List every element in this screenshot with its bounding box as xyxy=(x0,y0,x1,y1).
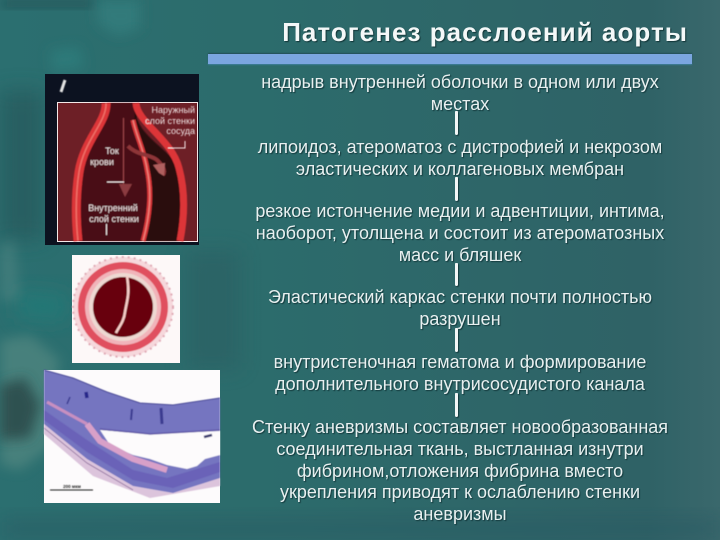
text block: intramural hematoma: внутристеночная гематома и формирование xyxy=(274,352,646,372)
arrow 2 xyxy=(455,177,458,201)
text block: aneurysm wall xyxy=(252,417,668,526)
arrow 5 xyxy=(455,393,458,417)
image: aortic dissection diagram: слой стенки xyxy=(89,214,139,224)
text block: aneurysm wall: фибрином,отложения фибрина вместо xyxy=(297,461,623,481)
image: aortic dissection diagram xyxy=(45,74,199,245)
image: aortic dissection diagram: Наружный xyxy=(152,105,195,115)
image: aortic dissection diagram: Внутренний xyxy=(88,203,138,213)
text block: elastic framework destroyed: разрушен xyxy=(419,309,501,329)
image: aortic dissection diagram: слой стенки xyxy=(145,116,195,126)
text block: aneurysm wall: Стенку аневризмы составляет новообразованная xyxy=(252,417,668,437)
text block: lipoidosis and atheromatosis: эластических и коллагеновых мембран xyxy=(296,159,624,179)
text block: aneurysm wall: аневризмы xyxy=(413,504,507,524)
text block: media thinning xyxy=(255,201,665,265)
text block: intimal tear: местах xyxy=(431,94,489,114)
image: micrograph of dissected aortic wall xyxy=(44,370,220,503)
image: aortic dissection diagram: крови xyxy=(90,157,114,167)
title: Патогенез расслоений аорты xyxy=(282,17,688,47)
arrow 1 xyxy=(455,111,458,135)
text block: intimal tear: надрыв внутренней оболочки в одном или двух xyxy=(261,72,659,92)
text block: intramural hematoma: дополнительного внутрисосудистого канала xyxy=(275,374,645,394)
text block: lipoidosis and atheromatosis xyxy=(258,137,662,180)
text block: aneurysm wall: укрепления приводят к ослаблению стенки xyxy=(280,482,640,502)
text block: media thinning: наоборот, утолщена и состоит из атероматозных xyxy=(256,223,664,243)
image: aorta cross-section histology xyxy=(72,255,180,363)
image: aortic dissection diagram: Ток xyxy=(105,146,119,156)
title underline bar xyxy=(208,54,692,64)
image: micrograph of dissected aortic wall: 200 мкм xyxy=(63,484,82,489)
image: aortic dissection diagram: сосуда xyxy=(166,126,195,136)
text block: intimal tear xyxy=(261,72,660,114)
arrow 3 xyxy=(455,263,458,286)
text block: lipoidosis and atheromatosis: липоидоз, атероматоз с дистрофией и некрозом xyxy=(258,137,662,157)
text block: media thinning: масс и бляшек xyxy=(399,245,521,265)
text block: aneurysm wall: соединительная ткань, выстланная изнутри xyxy=(276,439,644,459)
arrow 4 xyxy=(455,328,458,352)
text block: elastic framework destroyed: Эластический каркас стенки почти полностью xyxy=(268,287,652,307)
text block: media thinning: резкое истончение медии и адвентиции, интима, xyxy=(255,201,665,221)
text block: intramural hematoma xyxy=(274,352,647,396)
text block: elastic framework destroyed xyxy=(268,287,652,330)
